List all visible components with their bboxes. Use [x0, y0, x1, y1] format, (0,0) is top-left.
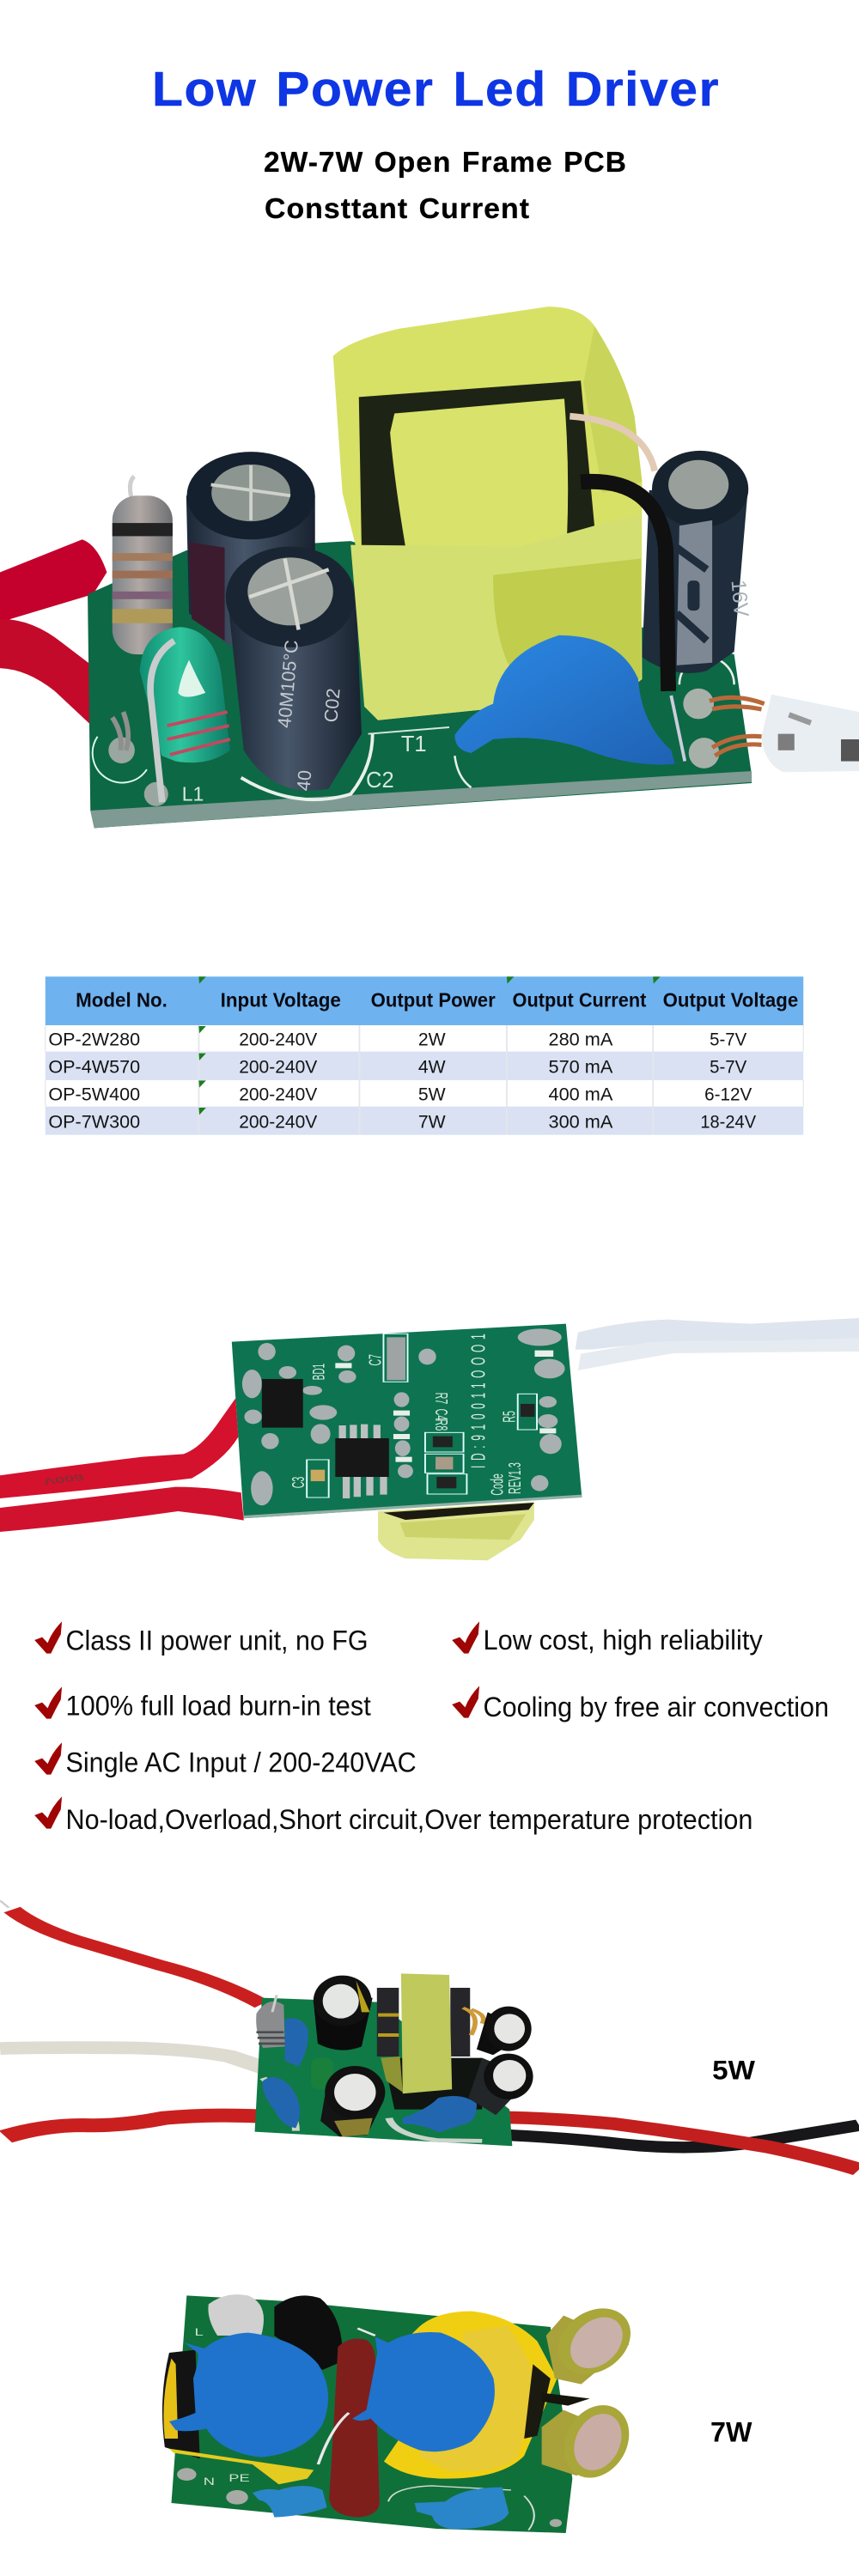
capacitor right: 16V	[726, 579, 752, 618]
pcb	[232, 1324, 582, 1518]
pcb: C2	[366, 769, 394, 793]
label: 5W: 5W	[712, 2055, 755, 2086]
row labels: OP-5W400	[48, 1084, 140, 1104]
pcb	[255, 1998, 512, 2146]
title: Low Power Led Driver	[152, 62, 720, 117]
row labels: 300 mA	[548, 1112, 613, 1132]
bridge rectifier	[262, 1379, 303, 1428]
feature list: Class II power unit, no FG	[66, 1625, 369, 1656]
capacitor front	[226, 547, 362, 792]
silkscreen: REV1.3	[505, 1462, 525, 1494]
row labels: 200-240V	[239, 1112, 318, 1132]
photo: driver board back	[0, 1318, 859, 1560]
silkscreen: Code	[488, 1473, 508, 1496]
white wires	[576, 1318, 859, 1370]
row labels	[48, 1030, 756, 1132]
feature: protection	[34, 1796, 752, 1835]
silkscreen: ID:910011OOO1	[466, 1334, 489, 1468]
feature list	[34, 1621, 829, 1835]
silkscreen: R7	[431, 1393, 451, 1404]
row labels: 200-240V	[239, 1057, 318, 1077]
left transformer edge	[162, 2350, 314, 2484]
feature: low cost	[452, 1621, 763, 1656]
feature: burn-in	[34, 1686, 371, 1722]
spec table	[46, 976, 803, 1135]
row labels: OP-2W280	[48, 1030, 140, 1049]
subtitle	[264, 146, 627, 224]
silkscreen: BD1	[310, 1364, 329, 1380]
smd parts	[307, 1334, 556, 1498]
grey resistor	[208, 2294, 264, 2336]
feature list: Single AC Input / 200-240VAC	[66, 1747, 417, 1778]
subtitle: 2W-7W Open Frame PCB	[264, 146, 627, 178]
feature list: 100% full load burn-in test	[66, 1690, 371, 1722]
transformer underside	[378, 1502, 534, 1560]
silkscreen: C4	[431, 1409, 451, 1420]
capacitor top-left	[314, 1976, 373, 2050]
capacitor front: 40M105°C	[273, 639, 302, 729]
pcb	[171, 2295, 572, 2533]
brown resistor	[329, 2339, 380, 2518]
photo: 5W driver	[0, 1900, 859, 2170]
capacitor front: C02	[320, 688, 344, 723]
blue disc left	[169, 2333, 328, 2458]
inductor	[140, 627, 230, 802]
silkscreen: C3	[289, 1477, 308, 1488]
transformer	[377, 1973, 484, 2093]
resistor	[256, 1995, 285, 2048]
lower blue capacitor	[403, 2096, 477, 2132]
row labels: 5-7V	[710, 1057, 747, 1077]
pcb: L	[195, 2327, 204, 2338]
black part	[274, 2295, 343, 2370]
blue caps	[263, 2018, 477, 2132]
capacitor front: 40	[292, 769, 315, 792]
row labels: 6-12V	[704, 1084, 752, 1104]
subtitle: Consttant Current	[265, 192, 530, 224]
photo: 7W driver	[162, 2294, 752, 2533]
driver ic	[335, 1425, 389, 1498]
capacitor bottom	[320, 2066, 385, 2136]
header labels: Input Voltage	[221, 989, 341, 1011]
silkscreen: R8	[431, 1419, 451, 1431]
row labels: 200-240V	[239, 1084, 318, 1104]
row labels: 2W	[418, 1030, 446, 1049]
lead wire	[318, 2329, 375, 2464]
gold capacitors	[542, 2302, 643, 2481]
white output wire	[762, 695, 859, 772]
header labels: Output Power	[371, 989, 496, 1011]
wires	[0, 1900, 859, 2170]
table header	[46, 976, 803, 1025]
silkscreen: C7	[366, 1354, 385, 1366]
red input wires	[0, 539, 107, 723]
red wires	[0, 1398, 244, 1532]
pcb: T1	[401, 732, 427, 756]
transformer leads	[570, 416, 668, 691]
row labels: 4W	[418, 1057, 446, 1077]
row labels: 5W	[418, 1084, 446, 1104]
silver pads	[242, 1328, 565, 1505]
header labels: Model No.	[76, 989, 168, 1011]
row labels: 18-24V	[700, 1112, 756, 1132]
green inductor	[311, 2058, 333, 2089]
solder pads and copper	[671, 689, 765, 769]
row labels: 200-240V	[239, 1030, 318, 1049]
row labels: 5-7V	[710, 1030, 747, 1049]
row labels: 7W	[418, 1112, 446, 1132]
label: 7W: 7W	[710, 2416, 752, 2447]
pcb	[88, 541, 752, 828]
silkscreen: R5	[500, 1411, 520, 1423]
pcb: PE	[228, 2473, 250, 2484]
row labels: OP-4W570	[48, 1057, 140, 1077]
row labels: OP-7W300	[48, 1112, 140, 1132]
photo: driver board front	[0, 307, 859, 828]
blue disc right	[352, 2332, 495, 2451]
capacitor back	[186, 452, 315, 647]
header labels: Output Current	[513, 989, 646, 1011]
copper strands	[113, 712, 128, 750]
row labels: 400 mA	[548, 1084, 613, 1104]
silkscreen	[289, 1334, 525, 1496]
capacitor right pair	[468, 2007, 533, 2115]
row labels: 570 mA	[548, 1057, 613, 1077]
small blue caps	[253, 2486, 509, 2529]
transformer	[333, 307, 643, 720]
yellow transformer	[384, 2312, 557, 2479]
red wires: 600V	[41, 1472, 86, 1486]
header labels	[76, 989, 798, 1011]
pcb: N	[204, 2476, 215, 2488]
blue capacitor	[454, 635, 675, 764]
resistor	[113, 477, 173, 654]
feature: class II	[34, 1621, 369, 1656]
row labels: 280 mA	[548, 1030, 613, 1049]
pcb: L1	[182, 782, 204, 805]
feature: input	[34, 1742, 417, 1778]
capacitor right	[643, 451, 752, 673]
table rows	[46, 976, 803, 1135]
